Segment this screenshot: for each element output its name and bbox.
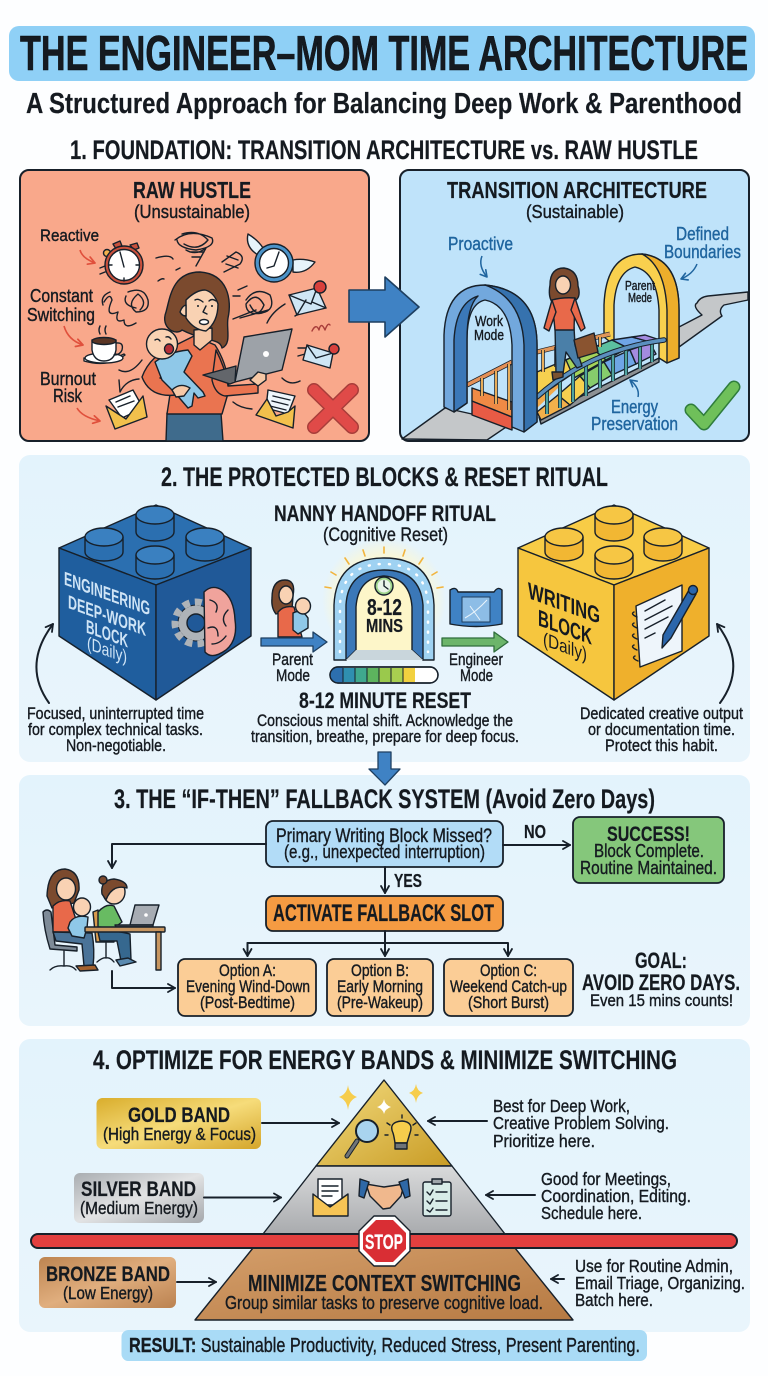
icon: glowing reset arch: MINS: [366, 616, 403, 636]
right arm: [212, 350, 258, 396]
gold band notes: Best for Deep Work,: [493, 1096, 630, 1116]
mother's chair: [43, 910, 77, 951]
success box: Routine Maintained.: [580, 858, 717, 878]
writing block description: Protect this habit.: [605, 737, 718, 755]
label: no: NO: [524, 822, 546, 842]
option c: (Short Burst): [468, 993, 549, 1012]
label: defined boundaries: Defined: [676, 224, 729, 244]
red arrows: [64, 250, 100, 421]
rainbow bridge: [467, 334, 664, 430]
hair: [47, 869, 79, 908]
hair: [549, 268, 579, 302]
pyramid caption: Group similar tasks to preserve cognitive load.: [225, 1293, 543, 1313]
parent's chair: [93, 910, 114, 942]
label: burnout risk: Risk: [53, 386, 83, 406]
bronze band notes: Batch here.: [575, 1290, 653, 1310]
option c: Weekend Catch-up: [450, 977, 567, 996]
label: parent mode: Parent: [272, 650, 313, 669]
arrow: hustle to architecture: [349, 277, 419, 337]
arrow: engineer mode: [442, 632, 508, 652]
icon: alarm clock: [100, 241, 143, 284]
icon: winged clock: [247, 234, 315, 282]
road: [402, 292, 748, 440]
silver band label: (Medium Energy): [80, 1198, 198, 1218]
bronze band label: BRONZE BAND: [46, 1263, 170, 1286]
label: constant switching: Constant: [30, 286, 93, 306]
gold band notes: Creative Problem Solving.: [493, 1113, 669, 1133]
arrow: gold notes: [428, 1120, 487, 1122]
sweater: [167, 336, 229, 414]
clock: [375, 577, 393, 595]
option b: [327, 959, 433, 1016]
legs: [555, 327, 582, 374]
bronze band label: (Low Energy): [63, 1283, 153, 1303]
front rail: [547, 343, 652, 414]
success box: SUCCESS!: [607, 823, 690, 846]
block label: DEEP-WORK: [68, 591, 146, 641]
engineering block description: Focused, uninterrupted time: [27, 705, 204, 723]
decision box: Primary Writing Block Missed?: [276, 826, 492, 847]
block: engineering deep-work: [59, 505, 251, 700]
label: parent mode: Parent: [625, 278, 655, 293]
arrow: silver band: [204, 1196, 281, 1198]
briefcase: [574, 333, 598, 358]
label: engineer mode: Mode: [460, 666, 493, 685]
red barrier: [31, 1234, 737, 1248]
arrow: gold band: [262, 1122, 339, 1124]
bronze band notes: Use for Routine Admin,: [575, 1256, 733, 1276]
pyramid: [195, 1080, 573, 1320]
transition architecture subheading: (Sustainable): [526, 202, 624, 222]
block: writing: [518, 505, 709, 700]
option a: Evening Wind-Down: [186, 977, 310, 996]
arrow: parent mode: [261, 632, 327, 652]
block label: [528, 579, 600, 666]
gold tier: [316, 1080, 452, 1166]
writing block description: Dedicated creative output: [580, 705, 743, 723]
result banner: RESULT: Sustainable Productivity, Reduced Stress, Present Parenting.: [129, 1335, 640, 1357]
icon: envelope top right: [289, 281, 326, 315]
fallback slot box: ACTIVATE FALLBACK SLOT: [273, 900, 494, 927]
baby: [68, 916, 88, 938]
silver band label: [74, 1173, 204, 1223]
label: constant switching: Switching: [27, 305, 95, 325]
option b: Early Morning: [337, 977, 423, 996]
face: [186, 290, 218, 331]
silver band notes: Good for Meetings,: [541, 1169, 671, 1189]
laptop: [203, 329, 292, 386]
icon: scribbles: [102, 232, 330, 409]
goal callout: Even 15 mins counts!: [590, 992, 733, 1010]
icon: yellow envelope left: [106, 390, 147, 429]
gold band label: GOLD BAND: [128, 1104, 230, 1127]
reset description: Conscious mental shift. Acknowledge the: [257, 712, 513, 730]
bronze band notes: Email Triage, Organizing.: [575, 1273, 745, 1293]
panel: raw hustle: [20, 170, 369, 441]
gold band label: [96, 1098, 261, 1149]
label: energy preservation: Energy: [611, 397, 658, 417]
icon: blueprint: [450, 588, 502, 626]
reset description: transition, breathe, prepare for deep focus.: [251, 728, 519, 746]
curved arrow right: [717, 624, 733, 703]
section 2 heading: 2. THE PROTECTED BLOCKS & RESET RITUAL: [161, 462, 608, 492]
reset heading: 8-12 MINUTE RESET: [299, 688, 471, 713]
arrow: bronze band: [177, 1281, 216, 1283]
goal callout: GOAL:: [635, 948, 687, 973]
option b: (Pre-Wakeup): [337, 993, 423, 1012]
arrow: to family: [112, 844, 266, 868]
arrow: bronze notes: [551, 1278, 564, 1280]
label: work mode: Mode: [474, 327, 504, 344]
icon: green check: [691, 387, 734, 424]
label: proactive: Proactive: [448, 234, 513, 254]
option c: [444, 959, 573, 1016]
timer text: 8-12: [367, 594, 402, 620]
panel: protected blocks and reset ritual: [19, 455, 750, 762]
panel: transition architecture: [400, 170, 749, 441]
option b: Option B:: [351, 961, 409, 980]
arrow: family to options: [112, 971, 175, 988]
curved arrow left: [36, 624, 53, 703]
label: reactive: Reactive: [40, 226, 99, 245]
icon: magnifier: [347, 1120, 378, 1156]
engineering block description: for complex technical tasks.: [28, 721, 203, 739]
left arm: [142, 345, 178, 395]
block label: BLOCK: [538, 606, 592, 651]
icon: red cross: [314, 390, 352, 427]
laptop: [130, 905, 159, 925]
icon: gear and brain: [175, 587, 236, 656]
decision box: [266, 821, 503, 867]
label: work mode: Work: [475, 313, 503, 330]
arrow: no to success: [503, 844, 570, 846]
bronze band label: [39, 1257, 176, 1308]
fallback slot box: [266, 896, 503, 931]
label: burnout risk: Burnout: [40, 369, 96, 389]
label: parent mode: Mede: [628, 290, 652, 305]
icon: coffee cup: [84, 326, 125, 363]
goal callout: [582, 948, 740, 1010]
option a: Option A:: [219, 961, 276, 980]
ritual heading: NANNY HANDOFF RITUAL: [274, 501, 496, 526]
icon: clipboard: [423, 1179, 451, 1216]
raw hustle heading: RAW HUSTLE: [133, 177, 251, 203]
label: engineer mode: Engineer: [449, 650, 503, 669]
figure: mother, baby and parent at desk: [43, 869, 165, 971]
figure: stressed mother with baby and laptop: [142, 272, 292, 441]
icon: yellow envelope right: [256, 390, 295, 428]
arrow: yes: [384, 867, 386, 893]
back rail: [467, 362, 512, 385]
block label: ENGINEERING: [64, 568, 150, 620]
sweater: [552, 298, 575, 330]
label: defined boundaries: Boundaries: [664, 242, 741, 262]
success box: [573, 817, 724, 883]
ritual subheading: (Cognitive Reset): [323, 525, 448, 546]
transition architecture heading: TRANSITION ARCHITECTURE: [447, 177, 707, 203]
icon: parent holding baby: [272, 580, 310, 637]
success box: Block Complete.: [594, 841, 704, 861]
blue pointers: [481, 256, 697, 397]
icon: light bulb: [385, 1115, 418, 1149]
gold band notes: Prioritize here.: [493, 1131, 595, 1151]
icon: stop sign: [359, 1216, 410, 1266]
parent: [98, 905, 122, 928]
branch arrows: [248, 931, 508, 956]
silver band notes: Schedule here.: [541, 1203, 642, 1223]
engineering block description: Non-negotiable.: [66, 737, 166, 755]
hair: [165, 272, 229, 348]
writing block description: or documentation time.: [588, 721, 735, 739]
panel: energy bands: [19, 1039, 750, 1332]
icon: notebook and pen: [633, 585, 698, 667]
result banner: [122, 1330, 647, 1361]
bronze tier: [195, 1248, 573, 1320]
option a: [178, 959, 316, 1016]
figure: walking woman with briefcase: [544, 268, 598, 380]
label: yes: YES: [394, 871, 422, 891]
block label: BLOCK: [86, 616, 128, 652]
jeans: [166, 413, 223, 441]
legs: [53, 932, 94, 966]
silver tier: [263, 1166, 505, 1234]
desk: [85, 927, 165, 932]
block label: (Daily): [87, 632, 127, 667]
label: energy preservation: Preservation: [591, 414, 678, 434]
icon: glowing reset arch: [322, 538, 446, 662]
silver band notes: Coordination, Editing.: [541, 1186, 691, 1206]
block label: (Daily): [543, 629, 587, 666]
block label: [64, 568, 150, 667]
torso: [53, 901, 80, 932]
panel: if-then fallback system: [19, 775, 750, 1026]
sparkles: [339, 1084, 423, 1114]
baby: [155, 350, 205, 408]
option a: (Post-Bedtime): [200, 993, 295, 1012]
deck steps: [472, 401, 512, 430]
icon: stop sign: STOP: [365, 1231, 403, 1254]
option c: Option C:: [480, 961, 537, 980]
gold band label: (High Energy & Focus): [103, 1124, 256, 1144]
arrow: section 2 to section 3: [369, 752, 400, 785]
blue arch: work mode: [444, 285, 537, 432]
arrow: silver notes: [486, 1194, 535, 1196]
block label: WRITING: [528, 579, 600, 630]
label: parent mode: Mode: [276, 666, 310, 685]
silver band label: SILVER BAND: [81, 1178, 196, 1201]
pyramid caption: [225, 1270, 543, 1313]
pyramid caption: MINIMIZE CONTEXT SWITCHING: [248, 1270, 521, 1296]
icon: handshake: [359, 1179, 410, 1209]
icon: envelope: [313, 1179, 348, 1216]
decision box: (e.g., unexpected interruption): [284, 842, 485, 862]
progress bar: [330, 667, 438, 683]
icon: envelope right: [303, 344, 339, 368]
yellow arch: parent mode: [604, 254, 679, 363]
raw hustle subheading: (Unsustainable): [134, 202, 250, 222]
